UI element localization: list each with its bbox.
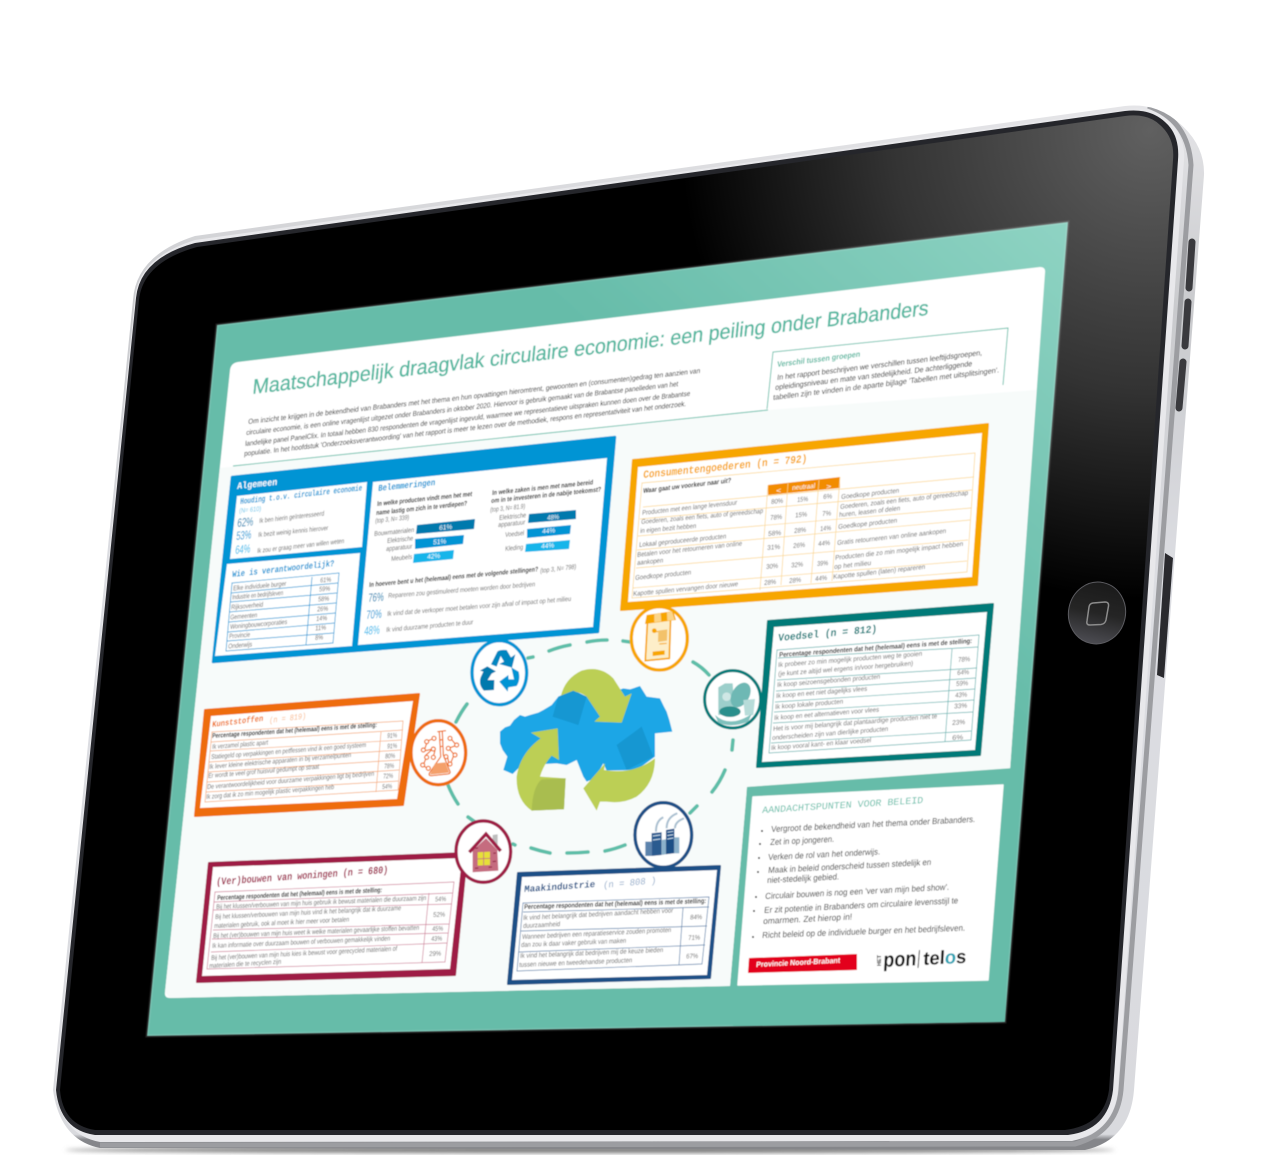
panel: kunststoffen: Ik zorg dat ik zo min mogelijk plastic verpakkingen heb	[206, 784, 335, 801]
panel: kunststoffen: Ik verzamel plastic apart	[212, 740, 269, 751]
heading: algemeen: Algemeen	[237, 477, 278, 492]
voedsel table	[769, 635, 979, 753]
panel: verbouwen van woningen: 45%	[432, 926, 443, 933]
bar chart: investeringen: 48%	[547, 514, 559, 522]
heading: verbouwen: (Ver)bouwen van woningen (n = 680)	[216, 865, 389, 889]
panel: maakindustrie: Percentage respondenten dat het (helemaal) eens is met de stelling:	[524, 898, 706, 911]
panel: verbouwen van woningen: Bij het klussen/verbouwen van mijn huis gebruik ik bewust materialen die duurzaam zijn	[216, 895, 427, 911]
table values: 28%	[789, 577, 801, 585]
map shade: lower square	[617, 727, 653, 770]
panel: verbouwen van woningen: Ik kan informatie over duurzaam bouwen of verbouwen gemakkelijk vinden	[212, 936, 391, 950]
policy bullets: Vergroot de bekendheid van het thema onder Brabanders.	[771, 814, 976, 834]
policy bullets: Maak in beleid onderscheid tussen stedelijk en	[768, 857, 932, 875]
table values: 15%	[795, 511, 807, 519]
panel: houding: Ik ben hierin geïnteresseerd	[259, 511, 325, 525]
panel: verschil tussen groepen: Verschil tussen groepen	[777, 350, 861, 369]
panel: verschil tussen groepen: opleidingsniveau en mate van stedelijkheid. De achterliggende	[775, 359, 973, 392]
table values: 15%	[797, 496, 808, 504]
table values: 6%	[823, 493, 832, 501]
panel: verbouwen van woningen: Bij het (ver)bouwen van mijn huis kies ik bewust voor gerecycled materialen of	[211, 946, 398, 962]
panel: wie is verantwoordelijk: 11%	[315, 625, 326, 632]
panel: verschil tussen groepen	[767, 328, 1008, 409]
panel: verbouwen van woningen: 43%	[431, 936, 442, 943]
table labels left: Waar gaat uw voorkeur naar uit?	[643, 477, 731, 495]
icon: volume button upper	[1189, 242, 1192, 288]
panel: wie is verantwoordelijk: 26%	[317, 606, 328, 613]
arrow: left	[517, 728, 566, 811]
table values: 80%	[771, 498, 783, 506]
panel: consumentengoederen: >	[826, 484, 831, 491]
table values: 7%	[822, 510, 831, 518]
table values: 26%	[793, 542, 805, 550]
panel: verbouwen van woningen: Bij het klussen/verbouwen van mijn huis vind ik het belangrijk dat ik duurzame	[215, 905, 402, 921]
heading: aandachtspunten: AANDACHTSPUNTEN VOOR BELEID	[762, 795, 924, 816]
intro text: circulaire economie, is een online vragenlijst uitgezet onder Brabanders in oktober 2020. Hiervoor is gebruik gemaakt van de Brabantse panelleden van het	[246, 379, 679, 437]
policy bullets: Zet in op jongeren.	[770, 834, 835, 847]
panel: maakindustrie: dan zou ik daar vaker gebruik van maken	[521, 938, 627, 949]
table labels right: Goedkope producten	[841, 488, 900, 501]
map: noord-brabant	[500, 686, 672, 782]
logo: het pon telos: HET	[877, 955, 883, 966]
table labels left: Betalen voor het retourneren van online	[637, 540, 743, 559]
icon: factory circle	[635, 803, 692, 867]
panel: verbouwen van woningen: Bij het (ver)bouwen van mijn huis weet ik welke materialen gevaarlijke stoffen bevatten	[213, 925, 420, 940]
panel: wie is verantwoordelijk: Elke individuele burger	[233, 581, 287, 592]
panel: aandachtspunten voor beleid	[733, 768, 1014, 1026]
table labels left: Lokaal geproduceerde producten	[639, 533, 727, 549]
table labels right	[833, 488, 969, 581]
intro text: landelijke panel PanelClix. In totaal hebben 830 respondenten de vragenlijst ingevuld, waarmee we representatieve uitspraken kunnen doen over de Brabantse	[245, 389, 691, 448]
bar chart: investeringen: Elektrische	[499, 512, 527, 522]
table values: 32%	[791, 561, 803, 569]
heading: maakindustrie: Maakindustrie	[524, 879, 596, 895]
panel: wie is verantwoordelijk: Onderwijs	[228, 641, 253, 650]
table values	[764, 493, 832, 587]
panel: voedsel: Ik koop en eet niet dagelijks vlees	[776, 686, 868, 700]
table labels right: op het milieu	[834, 560, 872, 571]
panel: maakindustrie: tussen nieuwe en tweedehandse producten	[519, 957, 633, 969]
panel: belemmeringen: In welke producten vindt men het met	[377, 491, 473, 508]
panel: kunststoffen: De verantwoordelijkheid voor duurzame verpakkingen ligt bij bedrijven	[207, 771, 375, 791]
panel: voedsel: 33%	[954, 703, 967, 710]
icon: sleep bar	[1157, 553, 1173, 678]
arrow: bottom right	[583, 758, 655, 811]
panel: voedsel: Ik koop en eet alternatieven voor vlees	[774, 707, 880, 722]
title: Maatschappelijk draagvlak circulaire economie: een peiling onder Brabanders	[252, 297, 930, 399]
table values: 14%	[820, 525, 831, 533]
heading: consumentengoederen: Consumentengoederen (n = 792)	[643, 454, 808, 482]
panel: voedsel: Het is voor mij belangrijk dat plantaardige producten niet te	[773, 713, 938, 733]
panel: wie is verantwoordelijk: Industrie en bedrijfsleven	[232, 590, 284, 601]
panel: belemmeringen: om in te investeren in de nabije toekomst?	[491, 486, 601, 505]
panel: voedsel: 23%	[952, 719, 965, 727]
panel: verbouwen van woningen: Percentage respondenten dat het (helemaal) eens is met de stelling:	[217, 887, 382, 902]
panel: kunststoffen: 91%	[387, 743, 397, 750]
kunststoffen table	[205, 721, 403, 802]
white sheet	[165, 267, 1045, 998]
panel: verbouwen van woningen: 29%	[429, 951, 441, 958]
panel: kunststoffen: Percentage respondenten dat het (helemaal) eens is met de stelling:	[212, 722, 377, 740]
logo: het pon telos: telos	[923, 947, 967, 970]
panel: houding: Ik zou er graag meer van willen weten	[257, 538, 345, 555]
heading: voedsel: Voedsel (n = 812)	[778, 624, 878, 645]
icon: recycling circle	[472, 641, 527, 705]
panel: belemmeringen: Belemmeringen	[378, 477, 436, 494]
panel: voedsel: onderscheiden zijn van dierlijke producten	[772, 726, 889, 742]
icon: side switch	[1179, 362, 1183, 408]
panel: voedsel: 59%	[956, 680, 968, 688]
table labels right: Goederen, zoals een fiets, auto of gereedschap	[840, 490, 969, 511]
panel: belemmeringen: (top 3, N= 798)	[540, 564, 576, 575]
panel: verbouwen van woningen	[197, 853, 467, 982]
bar chart: investeringen	[498, 510, 576, 553]
panel: houding: Ik bezit weinig kennis hierover	[258, 525, 329, 539]
logo: provincie noord-brabant: Provincie Noord-Brabant	[756, 956, 841, 969]
panel: houding: 62%	[237, 514, 254, 530]
panel: kunststoffen: 91%	[387, 732, 397, 740]
logo: provincie noord-brabant	[748, 954, 857, 973]
policy bullets: Richt beleid op de individuele burger en het bedrijfsleven.	[762, 923, 966, 940]
panel: voedsel	[757, 604, 993, 767]
panel: voedsel: Ik koop seizoensgebonden producten	[777, 674, 881, 689]
panel: verbouwen van woningen: 52%	[433, 912, 445, 919]
panel: belemmeringen: Repareren zou gestimuleerd moeten worden door bedrijven	[388, 581, 536, 600]
panel: belemmeringen	[364, 477, 601, 638]
bar chart: moeilijke producten: Meubels	[391, 554, 413, 563]
panel: kunststoffen: 80%	[385, 753, 395, 760]
panel: wie is verantwoordelijk: 14%	[316, 615, 327, 623]
bar chart: investeringen: 44%	[542, 527, 555, 535]
panel: blue frame	[213, 437, 615, 662]
bar chart: investeringen: Voedsel	[505, 530, 525, 539]
panel: maakindustrie: 67%	[686, 953, 698, 960]
panel: maakindustrie	[508, 866, 720, 984]
panel: kunststoffen	[195, 694, 419, 816]
panel: consumentengoederen	[621, 424, 988, 610]
heading: kunststoffen: Kunststoffen	[212, 714, 264, 730]
panel: kunststoffen: 72%	[383, 773, 393, 780]
panel: belemmeringen: (top 3, N= 81.9)	[490, 503, 525, 514]
policy bullets: Verken de rol van het onderwijs.	[768, 846, 881, 862]
panel: maakindustrie: Ik vind het belangrijk dat bedrijven aandacht hebben voor	[523, 907, 674, 922]
table values: 78%	[770, 514, 782, 522]
panel: wie is verantwoordelijk: 61%	[320, 577, 331, 584]
arrow: top right	[561, 669, 632, 723]
panel: voedsel: 78%	[958, 656, 970, 664]
panel: maakindustrie: Ik vind het belangrijk dat bedrijven mij de keuze bieden	[520, 947, 664, 960]
policy bullets	[752, 814, 976, 940]
panel: voedsel: (je kunt ze altijd wel ergens in/voor hergebruiken)	[778, 660, 913, 678]
panel: houding: 53%	[236, 528, 252, 543]
panel: voedsel: 64%	[957, 669, 969, 677]
table values: 58%	[768, 530, 781, 538]
table labels right: Goedkope producten	[838, 518, 898, 531]
panel: wie is verantwoordelijk: Provincie	[229, 632, 251, 640]
icon: house circle	[456, 821, 511, 882]
icon: chemistry circle	[411, 721, 466, 785]
panel: wie is verantwoordelijk: Gemeenten	[230, 612, 258, 621]
panel: wie is verantwoordelijk: Rijksoverheid	[231, 602, 264, 611]
panel: houding: Houding t.o.v. circulaire economie	[240, 483, 363, 507]
central map with recycling arrows	[500, 669, 672, 811]
table header cells	[768, 477, 840, 495]
bar chart: moeilijke producten: 51%	[433, 538, 446, 546]
table labels right: huren, leasen of delen	[839, 505, 901, 519]
panel: verbouwen van woningen: materialen die te recyclen zijn	[209, 959, 282, 970]
table values: 31%	[767, 544, 780, 552]
screen background	[147, 222, 1068, 1036]
home button	[1063, 577, 1131, 649]
panel: houding: (N= 610)	[239, 506, 261, 515]
tablet shadow	[65, 1147, 1115, 1153]
panel: belemmeringen: Ik vind duurzame producten te duur	[386, 619, 474, 634]
bar chart: moeilijke producten	[374, 519, 475, 563]
table values: 30%	[766, 563, 778, 571]
panel: voedsel: Percentage respondenten dat het (helemaal) eens is met de stelling:	[779, 638, 972, 659]
panel: kunststoffen: 78%	[384, 763, 394, 770]
panel: maakindustrie: duurzaamheid	[523, 921, 561, 930]
icon: volume button lower	[1185, 302, 1188, 346]
panel: kunststoffen: Er wordt te veel grof huisvuil gedumpt op straat	[208, 764, 320, 780]
table labels right: Kapotte spullen (laten) repareren	[833, 564, 926, 581]
bar chart: moeilijke producten: 61%	[439, 524, 452, 532]
table values: 44%	[815, 575, 827, 583]
panel: maakindustrie: Wanneer bedrijven een reparatieservice zouden promoten	[522, 927, 672, 941]
table labels left: Goederen, zoals een fiets, auto of gereedschap	[641, 508, 764, 526]
bar chart: moeilijke producten: 42%	[427, 553, 440, 561]
table labels left	[633, 477, 764, 598]
panel: belemmeringen: In hoevere bent u het (helemaal) eens met de volgende stellingen?	[369, 566, 538, 589]
panel: wie is verantwoordelijk: 58%	[318, 596, 329, 603]
panel: belemmeringen: (top 3, N= 339)	[375, 514, 409, 525]
panel: kunststoffen: (n = 819)	[269, 712, 307, 726]
table values: 28%	[764, 579, 776, 587]
policy bullets: Er zit potentie in Brabanders om circulaire levensstijl te	[764, 895, 959, 915]
maakindustrie table	[517, 897, 709, 971]
bar chart: investeringen: Kleding	[505, 544, 524, 553]
panel: wie is verantwoordelijk: Wie is verantwoordelijk?	[232, 558, 335, 580]
intro text: populatie. In het hoofdstuk 'Onderzoeksverantwoording' van het rapport is meer te lezen over de methodiek, respons en representativiteit van het onderzoek.	[244, 399, 687, 458]
dashed circular ring	[448, 640, 733, 853]
panel: wie is verantwoordelijk	[226, 558, 339, 651]
map shade: upper square	[553, 691, 587, 725]
table values: 39%	[817, 560, 828, 568]
bar chart: moeilijke producten: Elektrische	[387, 535, 414, 545]
panel: verschil tussen groepen: tabellen zijn te vinden in de aparte bijlage 'Tabellen met uitsplitsingen'.	[773, 365, 1000, 402]
table labels right: Producten die zo min mogelijk impact hebben	[835, 541, 964, 562]
panel: voedsel: Ik probeer zo min mogelijk producten weg te gooien	[778, 651, 923, 669]
table values: 28%	[794, 527, 806, 535]
panel: belemmeringen: 76%	[368, 590, 385, 605]
panel: voedsel: Ik koop lokale producten	[775, 699, 844, 711]
panel: voedsel: 6%	[952, 734, 963, 742]
panel: verbouwen van woningen: 54%	[435, 896, 446, 903]
panel: kunststoffen: Statiegeld op verpakkingen en petflessen vind ik een goed systeem	[211, 742, 367, 761]
panel: verbouwen van woningen: materialen gebruik, ook al moet ik hier meer voor betalen	[214, 917, 350, 930]
bar chart: moeilijke producten: Bouwmaterialen	[374, 527, 415, 538]
panel: houding: 64%	[235, 542, 251, 557]
panel: consumentengoederen: <	[776, 488, 781, 495]
logo: het pon telos	[877, 947, 967, 972]
panel: maakindustrie: (n = 808 )	[603, 875, 657, 891]
panel: wie is verantwoordelijk: Woningbouwcorporaties	[230, 619, 288, 631]
panel: maakindustrie: 71%	[688, 935, 700, 942]
panel: wie is verantwoordelijk: 8%	[315, 634, 323, 642]
icon: webshop circle	[631, 607, 687, 670]
table labels left: aankopen	[637, 557, 664, 567]
panel: belemmeringen: Ik vind dat de verkoper moet betalen voor zijn afval of impact op het milieu	[387, 596, 572, 618]
intro text: Om inzicht te krijgen in de bekendheid van Brabanders met het thema en hun opvattingen hieromtrent, gewoonten en (consumenten)gedrag ten aanzien van	[248, 366, 701, 426]
bar chart: investeringen: 44%	[541, 542, 554, 550]
panel: belemmeringen: 70%	[366, 607, 383, 622]
policy bullets: niet-stedelijk gebied.	[767, 871, 840, 885]
panel: kunststoffen: Ik lever kleine elektrische apparaten in bij verzamelpunten	[209, 752, 352, 771]
panel: belemmeringen: 48%	[364, 623, 381, 638]
infographic screen	[147, 222, 1068, 1036]
panel: wie is verantwoordelijk: 59%	[319, 586, 330, 593]
panel: kunststoffen: 54%	[382, 783, 392, 791]
bar chart: moeilijke producten: apparatuur	[386, 543, 413, 553]
panel: belemmeringen: In welke zaken is men met name bereid	[492, 479, 593, 497]
table labels left: Producten met een lange levensduur	[642, 500, 738, 517]
policy bullets: Circulair bouwen is nog een 'ver van mijn bed show'.	[765, 882, 950, 901]
table labels left: in eigen bezit hebben	[640, 523, 697, 535]
logo: het pon telos: pon	[883, 947, 917, 972]
panel: verschil tussen groepen: In het rapport beschrijven we verschillen tussen leeftijdsgroepen,	[777, 348, 983, 382]
icon: food circle	[705, 671, 761, 728]
bar chart: investeringen: apparatuur	[498, 519, 526, 529]
intro text	[244, 366, 701, 458]
panel: houding	[235, 483, 363, 557]
panel: consumentengoederen: neutraal	[792, 483, 816, 492]
panel: voedsel: Ik koop vooral kant- en klaar voedsel	[771, 737, 872, 752]
panel: voedsel: 43%	[955, 692, 967, 699]
table labels left: Kapotte spullen vervangen door nieuwe	[633, 581, 739, 598]
verbouwen table	[207, 882, 454, 969]
panel: maakindustrie: 84%	[690, 914, 702, 921]
table labels left: Goedkope producten	[635, 569, 692, 582]
policy bullets: omarmen. Zet hierop in!	[763, 912, 853, 926]
table labels right: Gratis retourneren van online aankopen	[837, 528, 947, 547]
table values: 44%	[818, 540, 830, 548]
panel: belemmeringen: name lastig om zich in te verdiepen?	[376, 500, 467, 517]
